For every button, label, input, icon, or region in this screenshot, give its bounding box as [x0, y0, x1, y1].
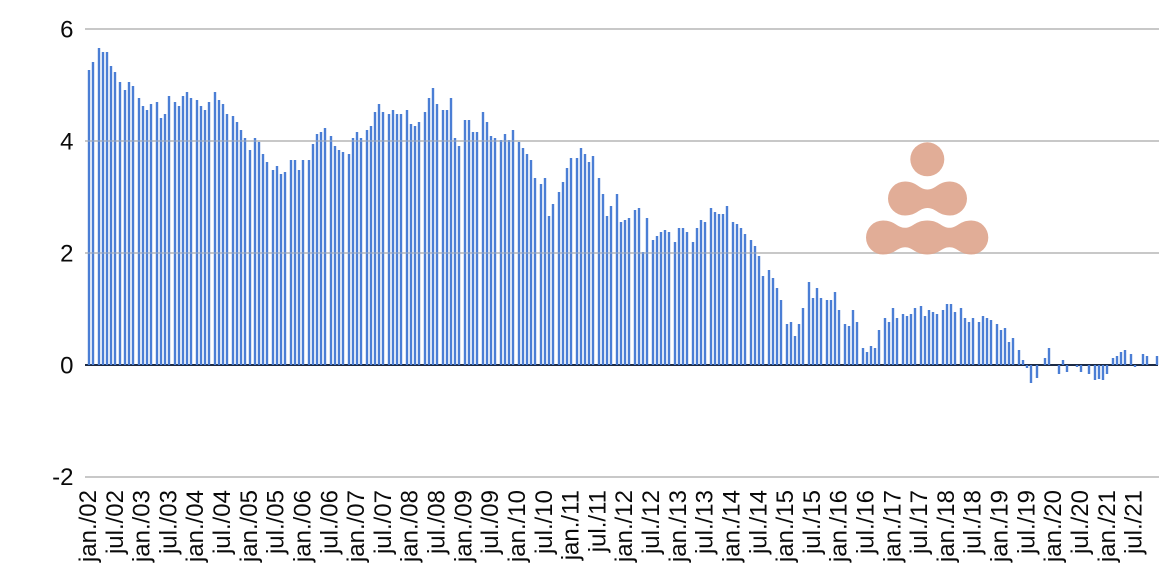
x axis labels: jan./09: [450, 490, 477, 563]
x axis labels: jan./04: [182, 490, 209, 563]
x axis labels: jul./02: [102, 490, 129, 555]
bars: monthly values: [89, 48, 1157, 383]
x axis labels: jan./18: [933, 490, 960, 563]
y axis labels: [52, 16, 74, 491]
x axis labels: jul./08: [424, 490, 450, 555]
x axis labels: jul./16: [852, 490, 880, 555]
x axis labels: jan./10: [504, 490, 531, 563]
x axis labels: jul./13: [692, 490, 719, 555]
x axis labels: jul./06: [316, 490, 343, 555]
x axis labels: jan./21: [1094, 490, 1121, 563]
x axis labels: jul./17: [906, 490, 933, 555]
x axis labels: jan./14: [718, 490, 745, 563]
x axis labels: jul./11: [584, 490, 611, 553]
y axis labels: 6: [60, 16, 74, 44]
x axis labels: jan./08: [397, 490, 424, 563]
x axis labels: jul./04: [209, 490, 236, 555]
x axis labels: jan./20: [1040, 490, 1067, 563]
x axis labels: jan./02: [75, 490, 102, 563]
x axis labels: jul./21: [1121, 490, 1148, 555]
y axis labels: 4: [60, 128, 74, 156]
x axis labels: jul./03: [155, 490, 182, 555]
x axis labels: jan./11: [558, 490, 585, 561]
x axis labels: jul./12: [638, 490, 665, 555]
x axis labels: jul./19: [1013, 490, 1040, 555]
x axis labels: jul./20: [1067, 490, 1094, 555]
x axis labels: jul./10: [531, 490, 558, 555]
x axis labels: jul./14: [745, 490, 772, 555]
x axis labels: jan./19: [986, 490, 1014, 563]
y axis labels: 2: [60, 240, 74, 268]
x axis labels: jul./05: [263, 490, 290, 555]
x axis labels: jan./16: [826, 490, 853, 563]
x axis labels: jan./03: [129, 490, 156, 563]
x axis labels: jul./09: [477, 490, 504, 555]
x axis labels: jul./07: [370, 490, 397, 555]
x axis labels: [75, 490, 1148, 563]
icon: watermark logo of stacked blobs: [866, 142, 988, 254]
x axis labels: jul./18: [960, 490, 987, 555]
x axis labels: jul./15: [799, 490, 826, 555]
x axis labels: jan./06: [290, 490, 316, 563]
x axis labels: jan./17: [879, 490, 906, 563]
x axis labels: jan./07: [343, 490, 370, 563]
x axis labels: jan./12: [611, 490, 638, 563]
x axis labels: jan./05: [236, 490, 263, 563]
x axis labels: jan./13: [665, 490, 692, 563]
y axis labels: -2: [52, 464, 74, 491]
x axis labels: jan./15: [772, 490, 799, 563]
y axis labels: 0: [60, 352, 74, 380]
